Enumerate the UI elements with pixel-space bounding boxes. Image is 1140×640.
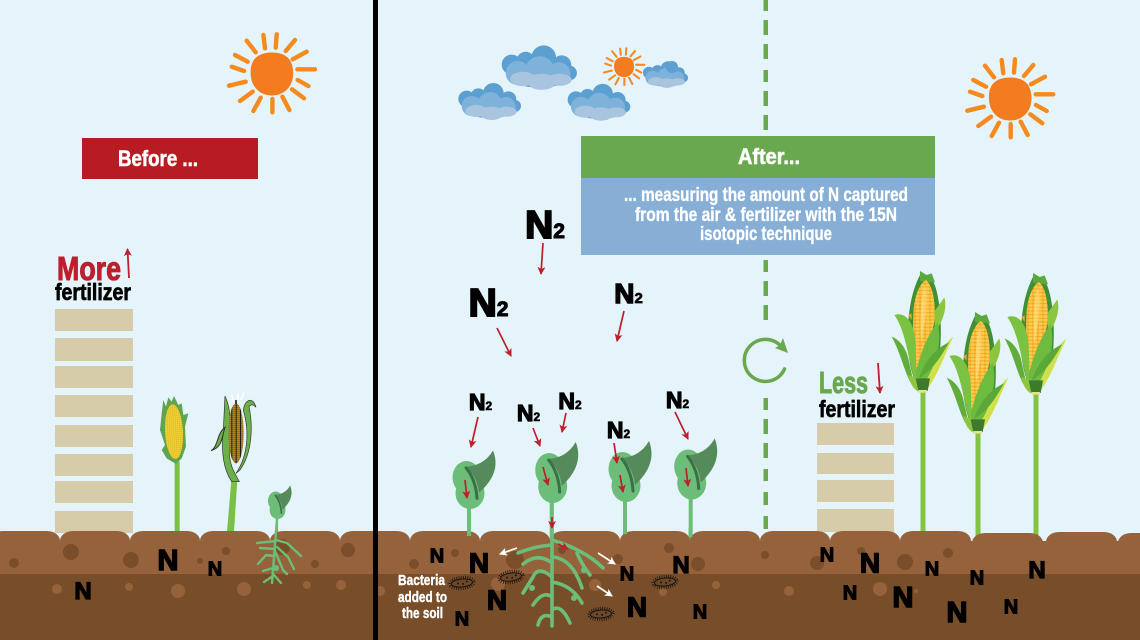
black vertical divider [373,0,378,640]
atmospheric nitrogen labels: N2 [517,400,540,426]
atmospheric nitrogen labels: N2 [614,278,643,309]
icon: sun right [967,59,1053,137]
soil nitrogen markers: N [925,558,939,580]
description box: from the air & fertilizer with the 15N [635,205,897,226]
soil layer [0,531,1140,640]
soil nitrogen markers: N [947,597,967,629]
description box [581,178,935,255]
description box: ... measuring the amount of N captured [624,185,908,206]
soil nitrogen markers: N [1028,557,1046,584]
icon: circular arrow [744,338,788,381]
soil nitrogen markers: N [487,584,507,616]
healthy corn plant 2 [947,312,1008,537]
atmospheric nitrogen labels: N2 [558,388,582,414]
soil nitrogen markers: N [820,544,834,566]
soil nitrogen markers: N [158,545,178,577]
label: more fertilizer [55,249,131,305]
soil nitrogen markers: N [430,546,444,568]
icon: small sun [604,48,644,85]
roots: left seedling [257,519,301,583]
after banner: After... [738,144,800,169]
label: bacteria added to the soil: added to [398,589,447,606]
soil nitrogen markers: N [693,602,707,624]
soil nitrogen markers: N [455,608,469,630]
label: bacteria added to the soil [398,572,447,622]
red nitrogen flow arrows [465,243,688,549]
soil nitrogen markers: N [208,558,222,580]
atmospheric nitrogen labels [469,204,689,443]
soil nitrogen markers: N [1004,596,1018,618]
atmospheric nitrogen labels: N2 [607,417,630,443]
bacteria [449,570,678,620]
soil nitrogen markers: N [893,582,913,614]
soil nitrogen markers: N [627,592,647,622]
description box: isotopic technique [700,224,832,245]
atmospheric nitrogen labels: N2 [525,204,565,247]
label: more fertilizer: More [57,250,121,287]
healthy corn plant 1 [892,271,953,534]
soil nitrogen markers: N [672,552,690,579]
label: bacteria added to the soil: Bacteria [398,572,446,589]
dashed green divider [764,0,768,529]
soil nitrogen markers: N [74,578,92,605]
soil nitrogen markers: N [970,568,984,590]
fertilizer stack: more [55,309,133,533]
atmospheric nitrogen labels: N2 [469,282,508,325]
label: bacteria added to the soil: the soil [402,605,443,622]
nutrient-deficient corn plant [211,393,256,532]
soil nitrogen markers: N [843,582,857,604]
before banner [82,138,258,179]
weak corn plant [160,396,188,605]
soil nitrogen markers: N [469,548,489,578]
healthy corn plant 3 [1005,273,1066,536]
label: less fertilizer: fertilizer [819,396,895,422]
seedling stems over soil [467,528,692,537]
atmospheric nitrogen labels: N2 [469,389,492,415]
fertilizer stack: less [817,423,894,532]
roots: main plant [518,503,603,626]
soil nitrogen markers [74,544,1046,630]
seedlings [268,438,717,565]
icon: sun left [229,34,315,112]
soil nitrogen markers: N [860,548,880,578]
before banner: Before ... [118,146,198,171]
label: less fertilizer [819,363,895,422]
after banner [581,136,935,178]
atmospheric nitrogen labels: N2 [666,387,689,413]
label: less fertilizer: Less [819,365,868,400]
white nitrogen release arrows [500,548,615,596]
soil nitrogen markers: N [620,564,634,586]
clouds [458,45,688,121]
label: more fertilizer: fertilizer [55,279,131,305]
